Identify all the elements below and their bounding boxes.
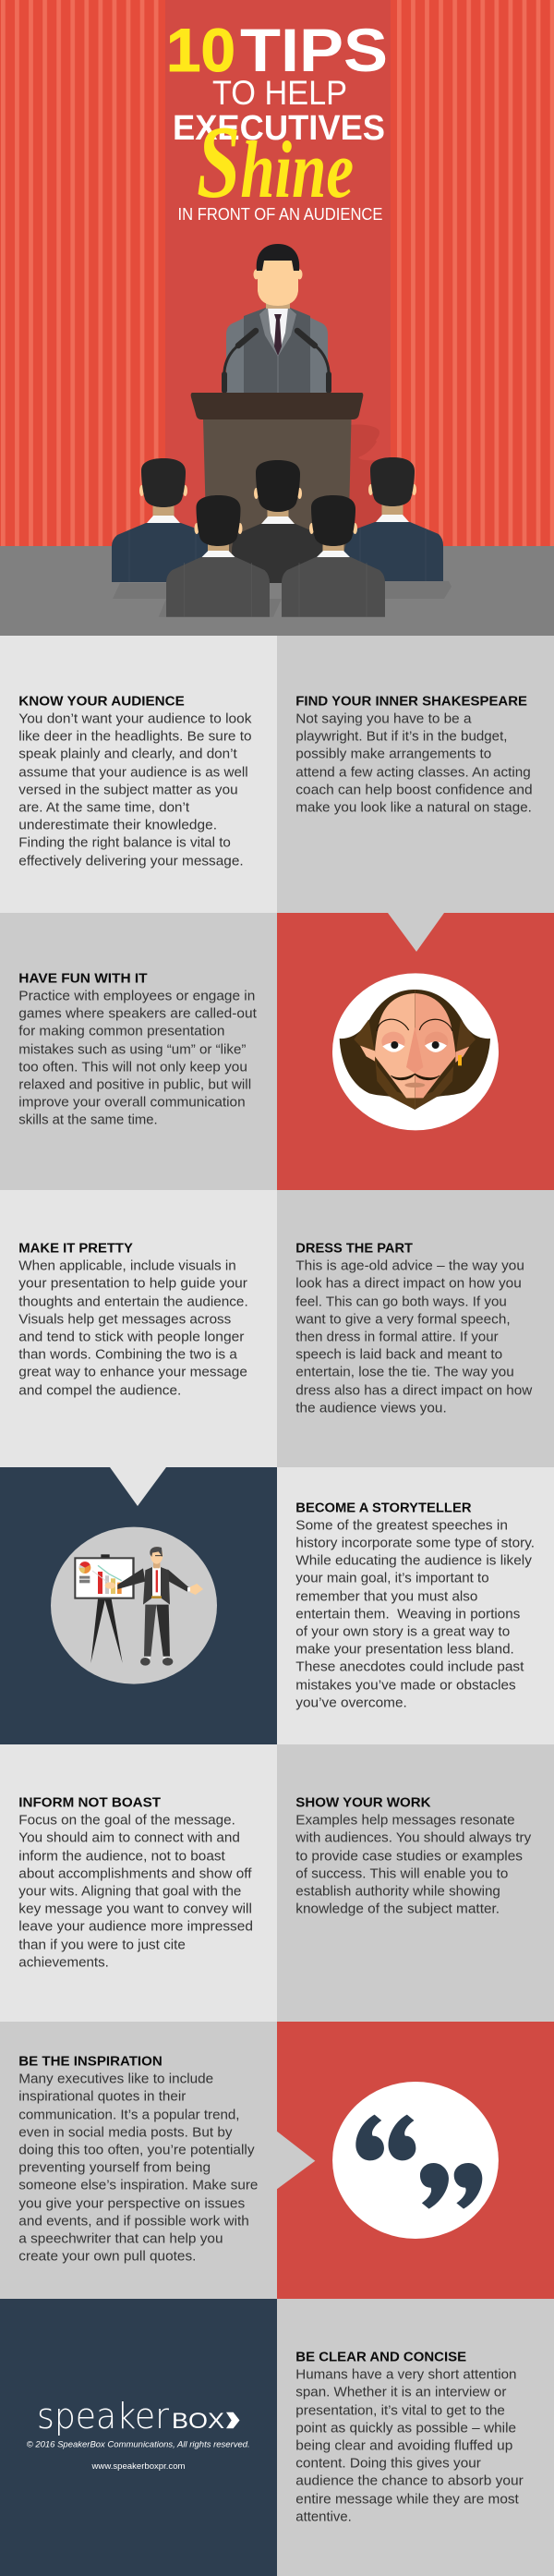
panel: become a storyteller: These anecdotes could include past xyxy=(295,1659,524,1674)
panel: be the inspiration: communication. It’s a popular trend, xyxy=(18,2108,239,2122)
title: IN FRONT OF AN AUDIENCE xyxy=(177,205,382,224)
panel: have fun with it: Practice with employees or engage in xyxy=(18,989,255,1003)
panel: make it pretty: When applicable, include visuals in xyxy=(18,1258,236,1273)
logo: speakerbox: BOX xyxy=(172,2409,224,2434)
panel: become a storyteller: of your own story is a great way to xyxy=(295,1624,510,1639)
panel: make it pretty: Visuals help get messages across xyxy=(18,1312,231,1327)
title: Shine xyxy=(197,105,354,220)
panel: dress the part xyxy=(295,1241,533,1416)
footer website: www.speakerboxpr.com xyxy=(91,2461,186,2472)
panel: be the inspiration: preventing yourself from being xyxy=(18,2160,211,2175)
panel: know your audience xyxy=(18,694,252,869)
panel: be clear and concise: presentation, it’s vital to get to the xyxy=(295,2403,505,2418)
panel: show your work xyxy=(295,1795,532,1916)
panel: become a storyteller: you’ve overcome. xyxy=(295,1695,407,1710)
panel: have fun with it: HAVE FUN WITH IT xyxy=(18,971,148,986)
panel: have fun with it: mistakes such as using “um” or “like” xyxy=(18,1042,247,1057)
panel: have fun with it: improve your overall communication xyxy=(18,1095,246,1110)
panel: show your work: SHOW YOUR WORK xyxy=(295,1795,431,1810)
arrow: shakespeare callout notch xyxy=(388,913,444,952)
audience member: back center xyxy=(232,460,324,583)
panel: become a storyteller: make your presentation less bland. xyxy=(295,1642,514,1657)
title: TO HELP xyxy=(212,74,347,112)
panel: become a storyteller: mistakes you’ve made or obstacles xyxy=(295,1678,516,1693)
title: 10 xyxy=(166,16,235,84)
panel: be the inspiration: someone else’s inspiration. Make sure xyxy=(18,2178,258,2193)
audience member: back left xyxy=(112,458,209,582)
panel: know your audience: KNOW YOUR AUDIENCE xyxy=(18,694,185,709)
title: TIPS xyxy=(240,16,388,84)
presenter xyxy=(105,1547,203,1666)
panel: be the inspiration: even in social media posts. But by xyxy=(18,2125,233,2140)
panel: make it pretty: great way to enhance your message xyxy=(18,1365,247,1379)
panel: be the inspiration: BE THE INSPIRATION xyxy=(18,2054,163,2069)
panel: have fun with it xyxy=(18,971,257,1127)
panel: have fun with it: too often. This will not only keep you xyxy=(18,1060,247,1075)
panel: be clear and concise: audience the chance to absorb your xyxy=(295,2473,524,2488)
arrow: inspiration callout notch xyxy=(277,2132,315,2189)
stage floor xyxy=(0,546,554,636)
panel: know your audience: underestimate their knowledge. xyxy=(18,818,217,832)
panel: dress the part: entertain, lose the tie. The way you xyxy=(295,1365,514,1379)
panel: know your audience: versed in the subject matter as you xyxy=(18,783,238,797)
panel: dress the part: feel. This can go both ways. If you xyxy=(295,1294,507,1309)
panel: be the inspiration: a speechwriter that can help you xyxy=(18,2231,223,2246)
panel: be the inspiration: and events, and if possible work with xyxy=(18,2214,249,2229)
panel: inform not boast: than if you were to just cite xyxy=(18,1938,186,1952)
icon: quotation marks xyxy=(332,2082,499,2239)
left curtain xyxy=(0,0,165,546)
panel: know your audience: Finding the right balance is vital to xyxy=(18,835,231,850)
icon: presenter at chart board xyxy=(51,1527,217,1684)
panel: be clear and concise: span. Whether it is an interview or xyxy=(295,2385,507,2400)
panel: dress the part: then dress in formal attire. If your xyxy=(295,1330,499,1344)
panel: know your audience: like deer in the headlights. Be sure to xyxy=(18,729,251,744)
panel: show your work: of success. This will enable you to xyxy=(295,1866,508,1881)
panel: know your audience: effectively delivering your message. xyxy=(18,854,244,869)
panel: inform not boast: achievements. xyxy=(18,1955,109,1970)
panel: dress the part: speech is laid back and meant to xyxy=(295,1347,502,1362)
panel: show your work: establish authority while showing xyxy=(295,1884,500,1899)
panel: make it pretty: and compel the audience. xyxy=(18,1383,181,1398)
panel: become a storyteller: remember that you must also xyxy=(295,1589,477,1604)
panel: find your inner shakespeare: coach can help boost confidence and xyxy=(295,783,533,797)
panel: know your audience: speak plainly and clearly, and don’t xyxy=(18,747,237,761)
logo: speakerbox: speaker xyxy=(37,2396,169,2436)
panel: know your audience: assume that your audience is as well xyxy=(18,765,248,780)
panel: inform not boast xyxy=(18,1795,253,1970)
panel: row backgrounds xyxy=(0,636,554,2576)
panel: find your inner shakespeare xyxy=(295,694,533,815)
right curtain xyxy=(391,0,554,546)
panel: become a storyteller: entertain them. Weaving in portions xyxy=(295,1607,520,1622)
panel: find your inner shakespeare: FIND YOUR INNER SHAKESPEARE xyxy=(295,694,527,709)
panel: be clear and concise: content. Doing this gives your xyxy=(295,2456,481,2471)
panel: dress the part: the audience views you. xyxy=(295,1401,447,1416)
panel: have fun with it: relaxed and positive in public, but will xyxy=(18,1077,251,1092)
panel: find your inner shakespeare: possibly make arrangements to xyxy=(295,747,491,761)
title xyxy=(166,16,388,224)
panel: dress the part: look has a direct impact on how you xyxy=(295,1276,522,1291)
panel: become a storyteller: your main goal, it’s important to xyxy=(295,1571,489,1586)
panel: show your work: to provide case studies or examples xyxy=(295,1849,523,1864)
panel: find your inner shakespeare: playwright. But if it’s in the budget, xyxy=(295,729,508,744)
chart xyxy=(79,1561,122,1594)
panel: find your inner shakespeare: Not saying you have to be a xyxy=(295,711,472,726)
panel: make it pretty: thoughts and entertain the audience. xyxy=(18,1294,248,1309)
panel: make it pretty: than words. Combining the two is a xyxy=(18,1347,238,1362)
footer copyright: © 2016 SpeakerBox Communications, All rights reserved. xyxy=(27,2439,250,2450)
speaker xyxy=(226,244,328,393)
hero stage illustration xyxy=(0,0,554,636)
panel: be clear and concise: being clear and avoiding fluffed up xyxy=(295,2438,512,2453)
panel: inform not boast: about accomplishments and show off xyxy=(18,1866,253,1881)
panel: dress the part: DRESS THE PART xyxy=(295,1241,413,1256)
panel: become a storyteller: Some of the greatest speeches in xyxy=(295,1518,508,1533)
panel: be clear and concise: Humans have a very short attention xyxy=(295,2367,517,2382)
panel: dress the part: dress also has a direct impact on how xyxy=(295,1383,533,1398)
panel: make it pretty: and tend to stick with people longer xyxy=(18,1330,245,1344)
panel: have fun with it: for making common presentation xyxy=(18,1024,224,1039)
panel: be the inspiration xyxy=(18,2054,258,2264)
panel: be the inspiration: doing this too often, you’re potentially xyxy=(18,2143,255,2157)
panel: show your work: knowledge of the subject matter. xyxy=(295,1902,500,1916)
panel: know your audience: You don’t want your audience to look xyxy=(18,711,252,726)
panel: have fun with it: games where speakers are called-out xyxy=(18,1006,257,1021)
panel: become a storyteller: While educating the audience is likely xyxy=(295,1553,533,1568)
icon: shakespeare portrait xyxy=(332,973,499,1130)
panel: find your inner shakespeare: attend a few acting classes. An acting xyxy=(295,765,531,780)
audience member: front right xyxy=(282,495,385,617)
panel: become a storyteller: BECOME A STORYTELLER xyxy=(295,1501,472,1515)
easel xyxy=(74,1554,135,1663)
panel: become a storyteller xyxy=(295,1501,535,1710)
panel: inform not boast: You should aim to connect with and xyxy=(18,1830,240,1845)
audience shadows xyxy=(113,581,452,617)
panel: be the inspiration: you give your perspective on issues xyxy=(18,2196,245,2211)
panel: inform not boast: leave your audience more impressed xyxy=(18,1919,253,1934)
stage backdrop xyxy=(165,0,391,546)
panel: make it pretty: MAKE IT PRETTY xyxy=(18,1241,133,1256)
panel: show your work: Examples help messages resonate xyxy=(295,1813,515,1828)
audience member: back right xyxy=(344,457,443,581)
panel: be clear and concise xyxy=(295,2350,524,2524)
panel: inform not boast: your wits. Aligning that goal with the xyxy=(18,1884,241,1899)
panel: become a storyteller: history incorporate some type of story. xyxy=(295,1536,535,1550)
panel: show your work: with audiences. You should always try xyxy=(295,1830,532,1845)
podium shadow xyxy=(345,424,391,546)
logo: speakerbox xyxy=(37,2396,240,2436)
panel: dress the part: want to give a very formal speech, xyxy=(295,1312,511,1327)
panel: dress the part: This is age-old advice – the way you xyxy=(295,1258,524,1273)
panel: be clear and concise: point as quickly as possible – while xyxy=(295,2421,516,2436)
panel: be clear and concise: BE CLEAR AND CONCISE xyxy=(295,2350,466,2364)
panel: inform not boast: Focus on the goal of the message. xyxy=(18,1813,235,1828)
panel: be the inspiration: inspirational quotes in their xyxy=(18,2089,186,2104)
audience member: front left xyxy=(166,495,270,617)
panel: be clear and concise: entire message while they are most xyxy=(295,2492,519,2507)
panel: have fun with it: skills at the same time. xyxy=(18,1112,158,1127)
podium xyxy=(191,393,363,554)
panel: be the inspiration: Many executives like to include xyxy=(18,2072,213,2086)
microphones xyxy=(224,331,329,391)
arrow: presenter callout notch xyxy=(110,1467,166,1506)
panel: be the inspiration: create your own pull quotes. xyxy=(18,2249,196,2264)
panel: make it pretty xyxy=(18,1241,248,1398)
panel: inform not boast: inform the audience, not to boast xyxy=(18,1849,225,1864)
title: EXECUTIVES xyxy=(173,109,385,148)
panel: make it pretty: your presentation to help guide your xyxy=(18,1276,247,1291)
panel: be clear and concise: attentive. xyxy=(295,2509,352,2524)
panel: inform not boast: INFORM NOT BOAST xyxy=(18,1795,161,1810)
panel: know your audience: are. At the same time, don’t xyxy=(18,800,189,815)
panel: inform not boast: key message you want to convey will xyxy=(18,1902,252,1916)
panel: find your inner shakespeare: make you look like a natural on stage. xyxy=(295,800,532,815)
